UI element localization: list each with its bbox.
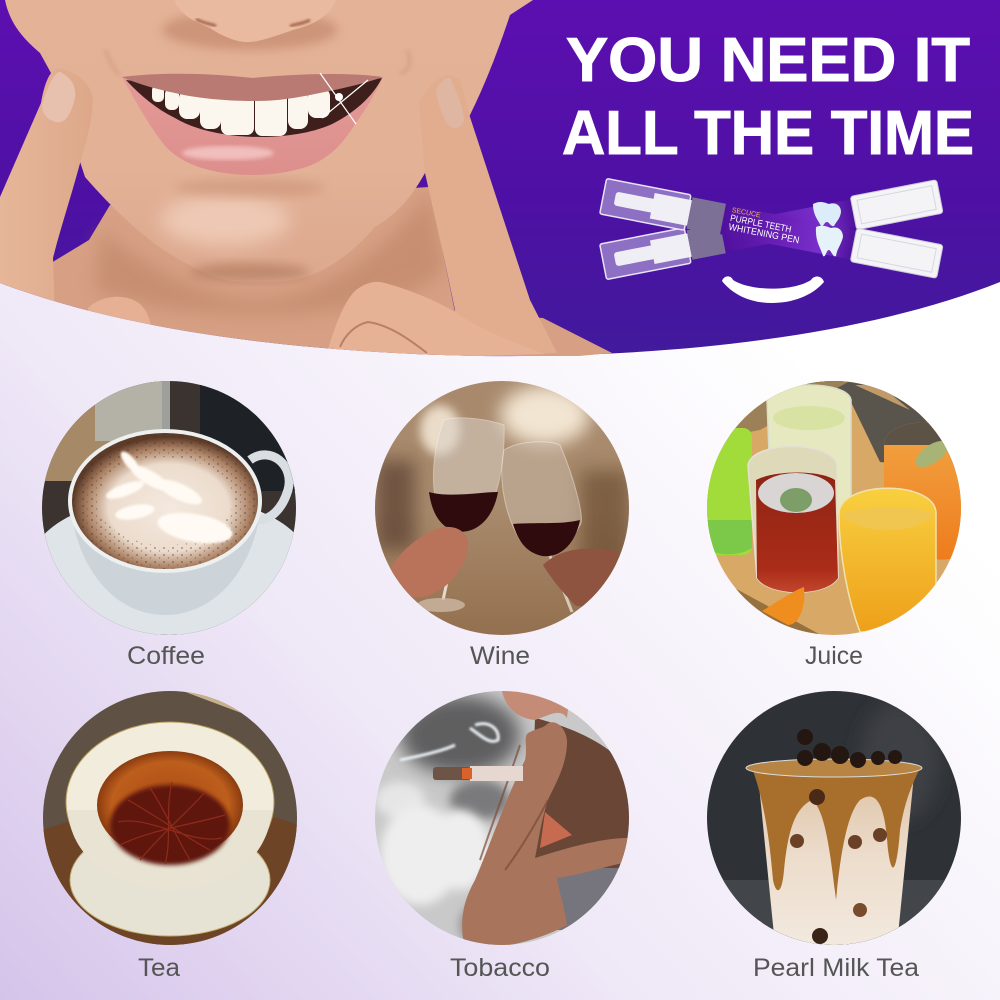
cigarette: [470, 766, 523, 781]
pearls: [790, 729, 902, 944]
nose shadow: [162, 10, 338, 50]
face: [5, 0, 533, 282]
neck and chest: [40, 187, 612, 365]
purple header band: [0, 0, 1000, 356]
teeth: [152, 85, 330, 136]
face and jaw: [530, 718, 630, 868]
cup: [70, 495, 262, 615]
nasolabial folds: [105, 50, 410, 75]
sparkle: [320, 73, 368, 124]
lips and nose: [502, 691, 570, 720]
red gap: [540, 812, 572, 848]
lower lip: [122, 77, 383, 175]
mouth dark: [126, 78, 382, 137]
photo: wine: [375, 381, 630, 635]
photo: juice: [706, 381, 965, 640]
pen front: [600, 179, 943, 279]
cup: [757, 765, 915, 945]
photo: pearl milk tea: [707, 691, 961, 950]
chin highlight: [160, 194, 290, 246]
hands: [388, 527, 468, 598]
yellow glass: [839, 488, 936, 632]
nose: [174, 0, 336, 42]
orange glass: [884, 422, 962, 560]
latte art: [104, 449, 235, 548]
tea leaves: [110, 785, 230, 865]
photo: tobacco: [375, 691, 630, 950]
pale glass: [767, 385, 851, 515]
pen rear: [600, 179, 943, 279]
chin shadow: [190, 263, 310, 281]
left thumb knuckle: [88, 296, 150, 324]
neck shadow under jaw: [95, 190, 445, 315]
hand: [462, 722, 627, 948]
pen front: PURPLE TEETH: [729, 213, 792, 236]
label: Tea: Tea: [138, 954, 180, 982]
right nail: [436, 78, 464, 128]
shirt: [545, 865, 630, 930]
icon: white smile: [722, 276, 824, 303]
upper lip: [122, 74, 383, 101]
label: Coffee: Coffee: [127, 642, 205, 670]
pen front: WHITENING PEN: [728, 222, 800, 246]
photo: coffee: [30, 381, 310, 635]
dark backdrop: [400, 695, 520, 775]
smoke: [375, 782, 490, 905]
lower lip highlight: [182, 146, 274, 160]
product: two whitening pens: [600, 179, 943, 279]
dark table: [807, 381, 955, 469]
thumb crease: [340, 322, 427, 353]
label: Tobacco: Tobacco: [450, 954, 550, 982]
glass left: [433, 418, 504, 532]
left nail: [42, 72, 75, 122]
green glass: [706, 428, 752, 555]
red glass: [748, 446, 838, 592]
caramel drips: [752, 768, 920, 900]
photo: smiling face with fingers: [0, 0, 612, 365]
label: Juice: Juice: [805, 642, 863, 670]
title: YOU NEED IT: [566, 26, 970, 95]
right finger: [419, 75, 557, 356]
tooth icons: [813, 202, 841, 226]
right thumb: [328, 282, 545, 358]
left finger: [0, 68, 93, 320]
label: Pearl Milk Tea: Pearl Milk Tea: [753, 954, 919, 982]
photo: tea: [43, 690, 300, 945]
nostrils: [196, 19, 310, 26]
title: [562, 26, 974, 168]
glass right: [502, 442, 581, 552]
label: Wine: Wine: [470, 642, 530, 670]
under-lip shade: [175, 179, 325, 197]
title: ALL THE TIME: [562, 99, 974, 168]
pen label text: SECUCE: [731, 207, 761, 220]
orange slice: [762, 587, 804, 625]
